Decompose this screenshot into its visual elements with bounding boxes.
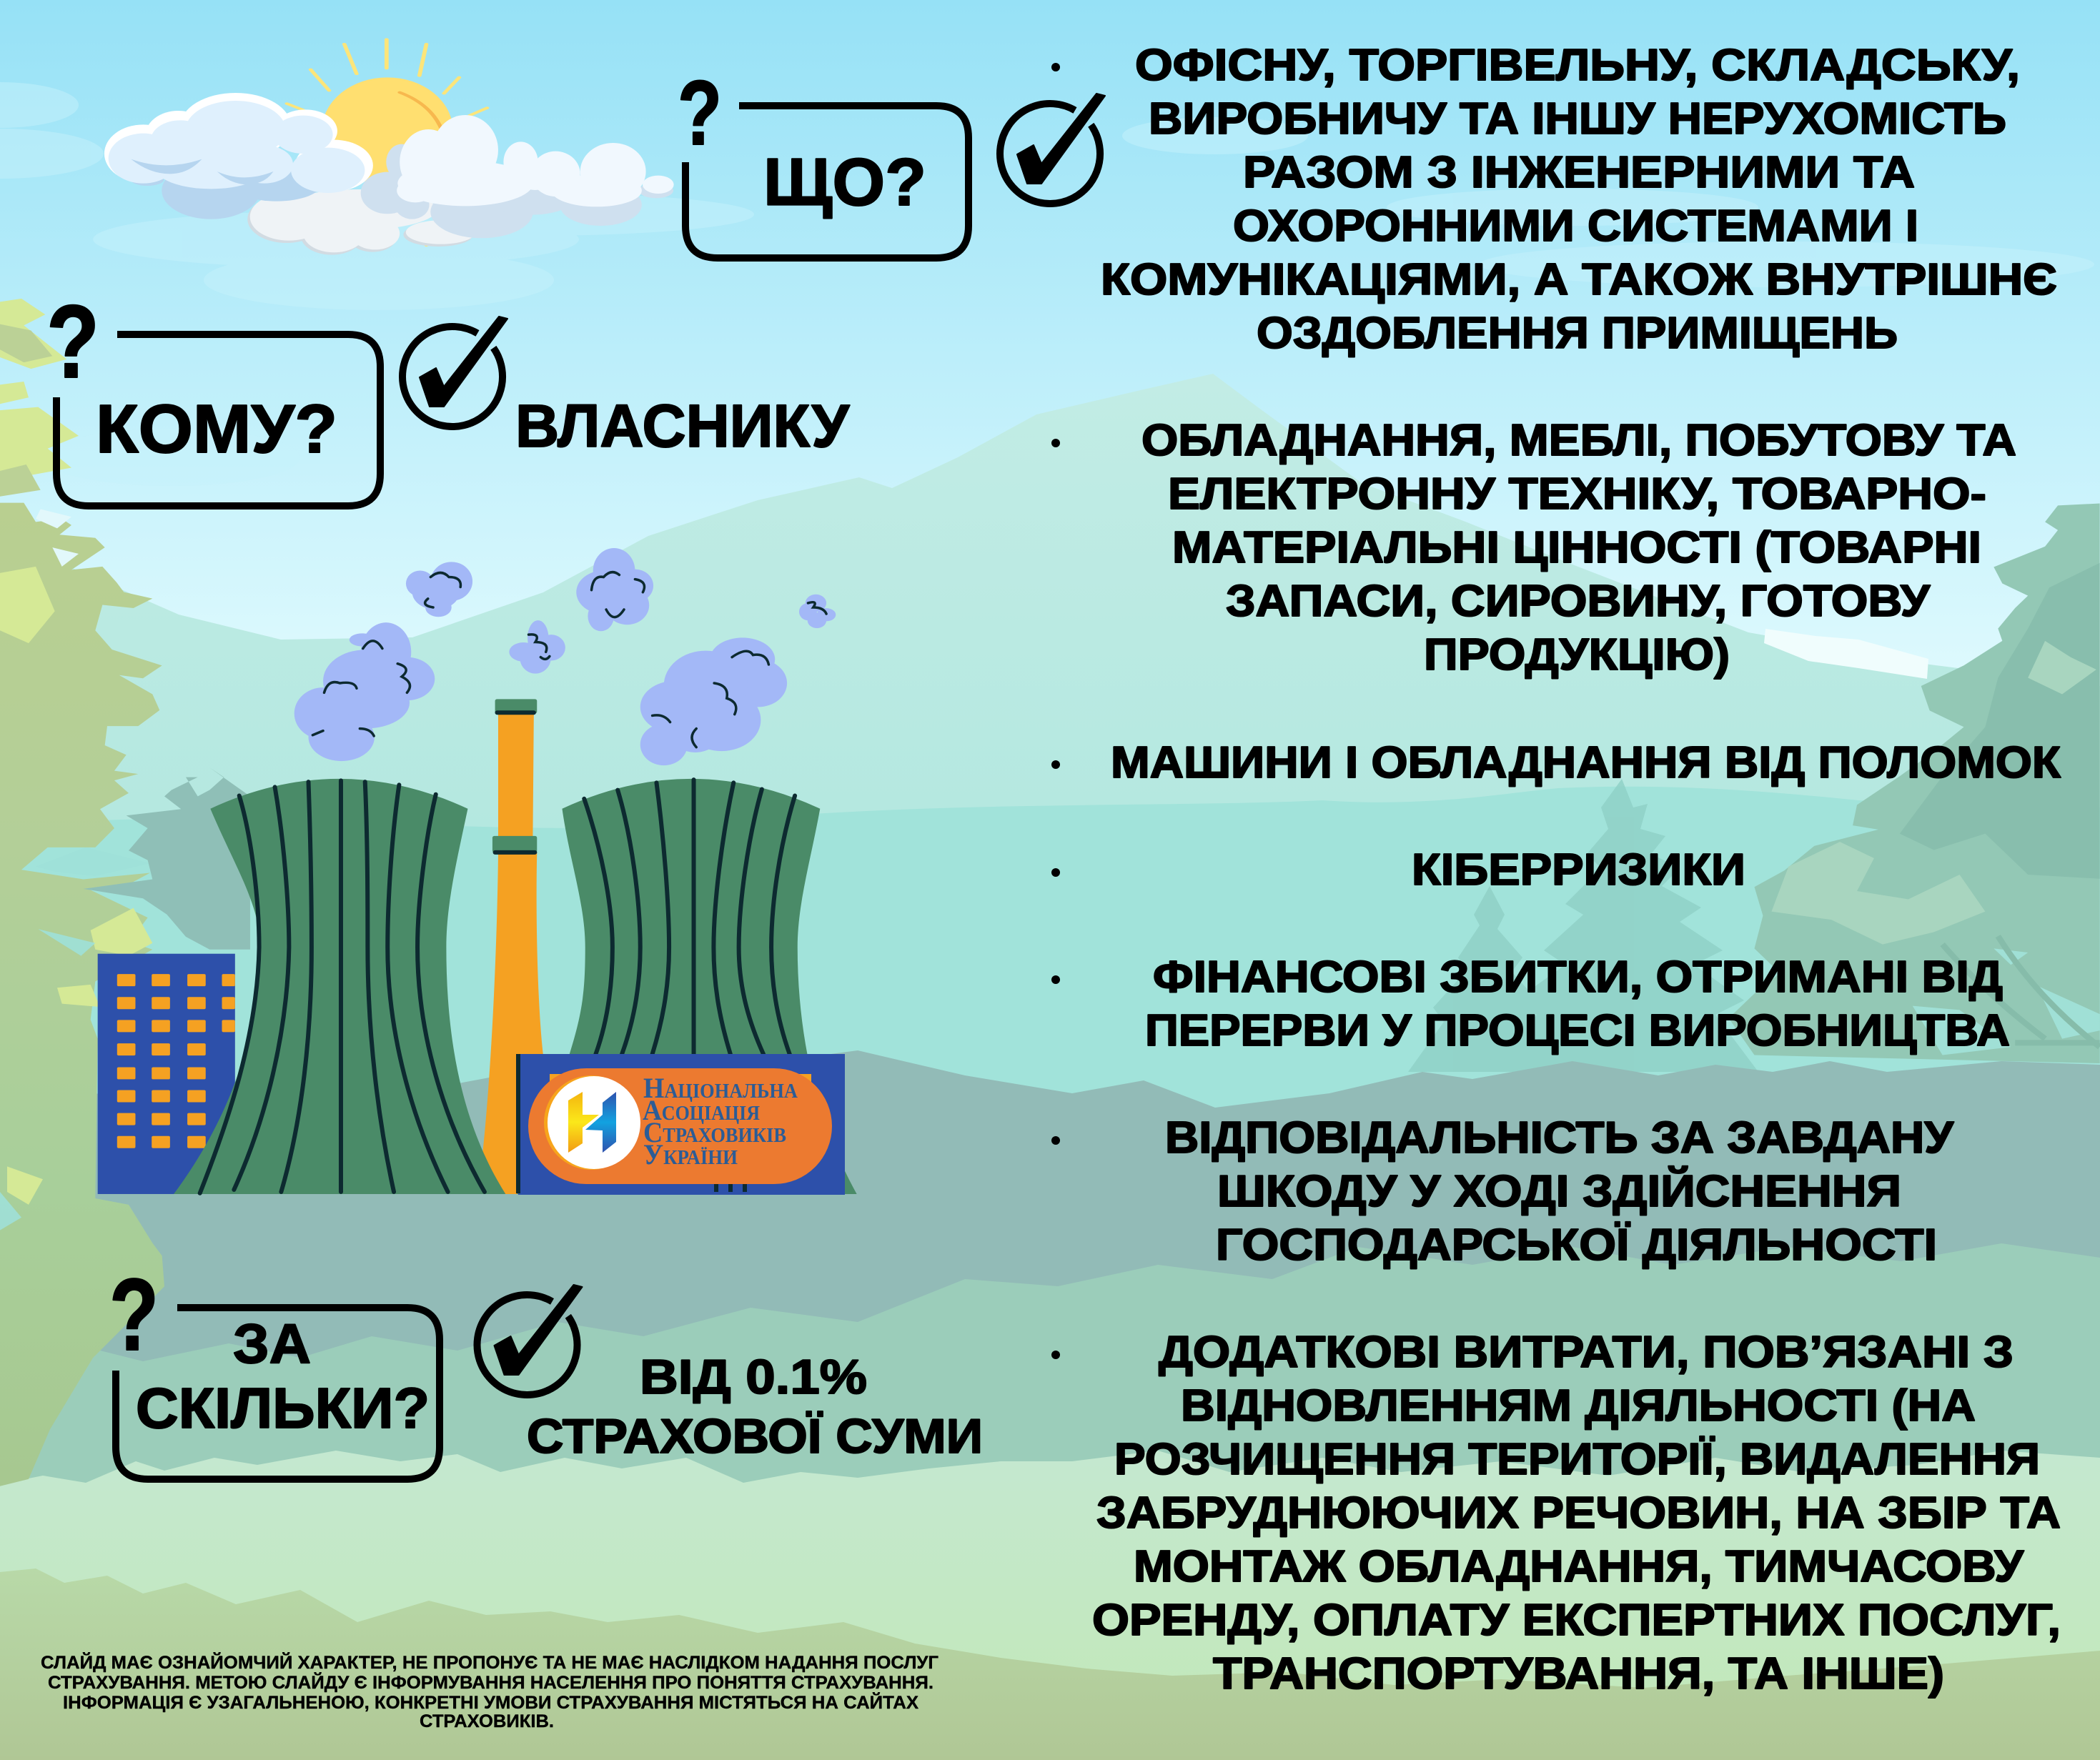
lower cloud — [247, 189, 515, 255]
sun — [322, 77, 453, 184]
answer: власнику: ВЛАСНИКУ — [515, 392, 851, 459]
disclaimer: СТРАХОВИКІВ. — [420, 1711, 554, 1731]
bullet markers — [1051, 63, 1060, 1359]
item: additional costs: ТРАНСПОРТУВАННЯ, ТА ІНШЕ) — [1213, 1649, 1944, 1699]
item: financial losses: ФІНАНСОВІ ЗБИТКИ, ОТРИМАНІ ВІД — [1153, 953, 2003, 1002]
illustration: sun and clouds — [104, 39, 674, 255]
label: КОМУ? — [96, 391, 337, 467]
item: real estate: КОМУНІКАЦІЯМИ, А ТАКОЖ ВНУТРІШНЄ — [1101, 255, 2057, 304]
right tower — [517, 779, 857, 1194]
item: liability — [1165, 1113, 1955, 1270]
item: equipment: ОБЛАДНАННЯ, МЕБЛІ, ПОБУТОВУ ТА — [1141, 416, 2016, 465]
callout: ЗА СКІЛЬКИ?: СКІЛЬКИ? — [136, 1376, 430, 1440]
callout: КОМУ? — [46, 284, 380, 506]
logo text: Асоціація — [643, 1094, 760, 1126]
building — [98, 954, 235, 1194]
left tree — [0, 299, 250, 1486]
item: real estate: ОХОРОННИМИ СИСТЕМАМИ І — [1233, 202, 1918, 251]
item: financial losses — [1145, 953, 2010, 1055]
chimney — [477, 699, 543, 1194]
panel: coverage list — [1051, 41, 2061, 1699]
ground — [0, 1568, 2100, 1760]
meadow — [0, 1451, 2100, 1760]
label: ЩО? — [763, 144, 926, 219]
item: real estate: ОЗДОБЛЕННЯ ПРИМІЩЕНЬ — [1257, 309, 1898, 358]
icon: check 3 — [477, 1285, 582, 1395]
icon: check 1 — [1000, 94, 1105, 204]
logo text: Страховиків — [643, 1116, 786, 1148]
answer: price: СТРАХОВОЇ СУМИ — [527, 1409, 983, 1463]
item: additional costs: РОЗЧИЩЕННЯ ТЕРИТОРІЇ, ВИДАЛЕННЯ — [1114, 1435, 2040, 1484]
orange pill — [528, 1068, 832, 1184]
white streak — [1764, 629, 1928, 679]
question mark: ? — [678, 62, 722, 164]
item: equipment: МАТЕРІАЛЬНІ ЦІННОСТІ (ТОВАРНІ — [1172, 523, 1981, 572]
left cloud — [104, 93, 373, 219]
item: cyber risks: КІБЕРРИЗИКИ — [1412, 845, 1745, 895]
callout: ЗА СКІЛЬКИ? — [109, 1258, 440, 1479]
logo text: Національна — [643, 1072, 798, 1104]
item: real estate: ОФІСНУ, ТОРГІВЕЛЬНУ, СКЛАДСЬКУ, — [1135, 41, 2020, 90]
conifers — [1408, 779, 1758, 1072]
item: additional costs: ОРЕНДУ, ОПЛАТУ ЕКСПЕРТНИХ ПОСЛУГ, — [1092, 1596, 2061, 1645]
logo text — [643, 1072, 798, 1170]
item: real estate: РАЗОМ З ІНЖЕНЕРНИМИ ТА — [1243, 148, 1915, 197]
disclaimer: ІНФОРМАЦІЯ Є УЗАГАЛЬНЕНОЮ, КОНКРЕТНІ УМОВИ СТРАХУВАННЯ МІСТЯТЬСЯ НА САЙТАХ — [63, 1691, 918, 1713]
disclaimer — [41, 1651, 938, 1731]
item: additional costs: ВІДНОВЛЕННЯМ ДІЯЛЬНОСТІ (НА — [1181, 1381, 1976, 1431]
sun rays — [287, 39, 487, 245]
answer: price — [527, 1350, 983, 1463]
tree behind tower — [84, 767, 250, 950]
disclaimer: СЛАЙД МАЄ ОЗНАЙОМЧИЙ ХАРАКТЕР, НЕ ПРОПОНУЄ ТА НЕ МАЄ НАСЛІДКОМ НАДАННЯ ПОСЛУГ — [41, 1651, 938, 1673]
item: additional costs — [1092, 1328, 2061, 1699]
item: additional costs: ЗАБРУДНЮЮЧИХ РЕЧОВИН, НА ЗБІР ТА — [1096, 1488, 2061, 1538]
frame — [685, 106, 969, 258]
right cloud — [361, 115, 674, 238]
right tree — [1729, 504, 2100, 1063]
item: equipment: ПРОДУКЦІЮ) — [1424, 630, 1730, 680]
sign board — [518, 1054, 845, 1195]
item: liability: ГОСПОДАРСЬКОЇ ДІЯЛЬНОСТІ — [1216, 1220, 1937, 1270]
question mark: ? — [109, 1258, 159, 1372]
frame — [116, 1308, 440, 1479]
item: liability: ШКОДУ У ХОДІ ЗДІЙСНЕННЯ — [1217, 1166, 1901, 1216]
item: financial losses: ПЕРЕРВИ У ПРОЦЕСІ ВИРОБНИЦТВА — [1145, 1006, 2010, 1055]
illustration: power plant — [98, 548, 857, 1194]
smoke clouds — [294, 548, 836, 765]
logo — [544, 1075, 640, 1170]
item: equipment: ЗАПАСИ, СИРОВИНУ, ГОТОВУ — [1226, 577, 1931, 626]
item: additional costs: МОНТАЖ ОБЛАДНАННЯ, ТИМЧАСОВУ — [1134, 1542, 2025, 1591]
item: additional costs: ДОДАТКОВІ ВИТРАТИ, ПОВ’ЯЗАНІ З — [1159, 1328, 2014, 1377]
label: ЗА — [233, 1312, 311, 1375]
answer: price: ВІД 0.1% — [640, 1350, 867, 1404]
icon: check 2 — [402, 317, 507, 427]
smoke curls — [312, 572, 826, 747]
item: liability: ВІДПОВІДАЛЬНІСТЬ ЗА ЗАВДАНУ — [1165, 1113, 1955, 1163]
item: machinery: МАШИНИ І ОБЛАДНАННЯ ВІД ПОЛОМОК — [1111, 738, 2061, 787]
forest band — [0, 1050, 2100, 1515]
item: equipment — [1141, 416, 2016, 680]
left tower — [174, 779, 505, 1194]
logo text: України — [643, 1138, 738, 1170]
frame — [56, 334, 380, 506]
item: real estate — [1101, 41, 2057, 358]
callout: ЩО? — [678, 62, 969, 258]
panel: association sign — [518, 1054, 845, 1195]
question mark: ? — [46, 284, 99, 399]
item: real estate: ВИРОБНИЧУ ТА ІНШУ НЕРУХОМІСТЬ — [1149, 94, 2006, 144]
item: equipment: ЕЛЕКТРОННУ ТЕХНІКУ, ТОВАРНО- — [1168, 469, 1986, 519]
disclaimer: СТРАХУВАННЯ. МЕТОЮ СЛАЙДУ Є ІНФОРМУВАННЯ НАСЕЛЕННЯ ПРО ПОНЯТТЯ СТРАХУВАННЯ. — [48, 1671, 933, 1693]
